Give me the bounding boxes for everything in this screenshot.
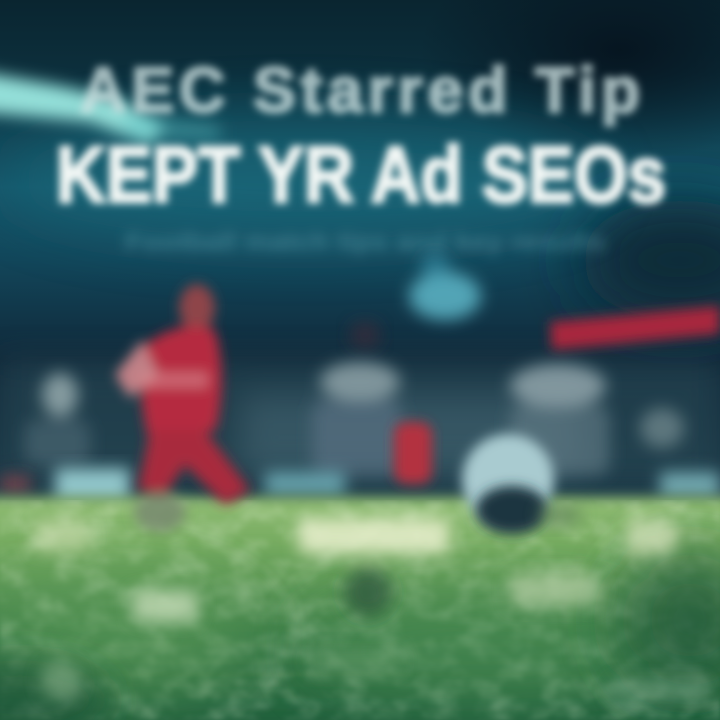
- figure: left grey stat: [25, 373, 90, 465]
- player torso: [141, 326, 222, 445]
- label: right: [626, 520, 676, 554]
- grass pitch: [0, 497, 720, 720]
- small red player: [394, 422, 432, 484]
- player jersey stripe: [140, 372, 208, 388]
- figure: far right grey stat: [640, 408, 684, 448]
- pitch labels: [34, 518, 706, 700]
- player arm: [115, 340, 158, 398]
- label: left: [34, 520, 90, 552]
- player legs: [138, 430, 250, 505]
- figure: center grey stat: [312, 362, 402, 475]
- stadium crowd band: [0, 360, 720, 480]
- player head: [179, 284, 215, 332]
- pitch-edge glow: [0, 468, 720, 502]
- title: [56, 54, 666, 219]
- title line 1: AEC Starred Tip: [80, 54, 640, 126]
- label: lower right: [510, 574, 600, 606]
- label: bottom left: [40, 660, 80, 700]
- red player: [115, 284, 250, 532]
- label: centre: [298, 518, 450, 554]
- red banner: [550, 306, 720, 350]
- icon: glowing emblem: [409, 252, 481, 320]
- label: bottom right: [610, 680, 706, 700]
- subtitle: Football match tips and key results: [125, 229, 605, 256]
- player boot: [134, 492, 186, 532]
- football: [462, 434, 582, 534]
- icon: dark circle on pitch: [344, 568, 392, 616]
- light streak: [0, 72, 220, 145]
- small dark red mark: [349, 321, 381, 349]
- figure: right grey stat: [510, 364, 610, 475]
- label: lower left: [132, 590, 198, 622]
- label: bottom centre: [310, 650, 400, 672]
